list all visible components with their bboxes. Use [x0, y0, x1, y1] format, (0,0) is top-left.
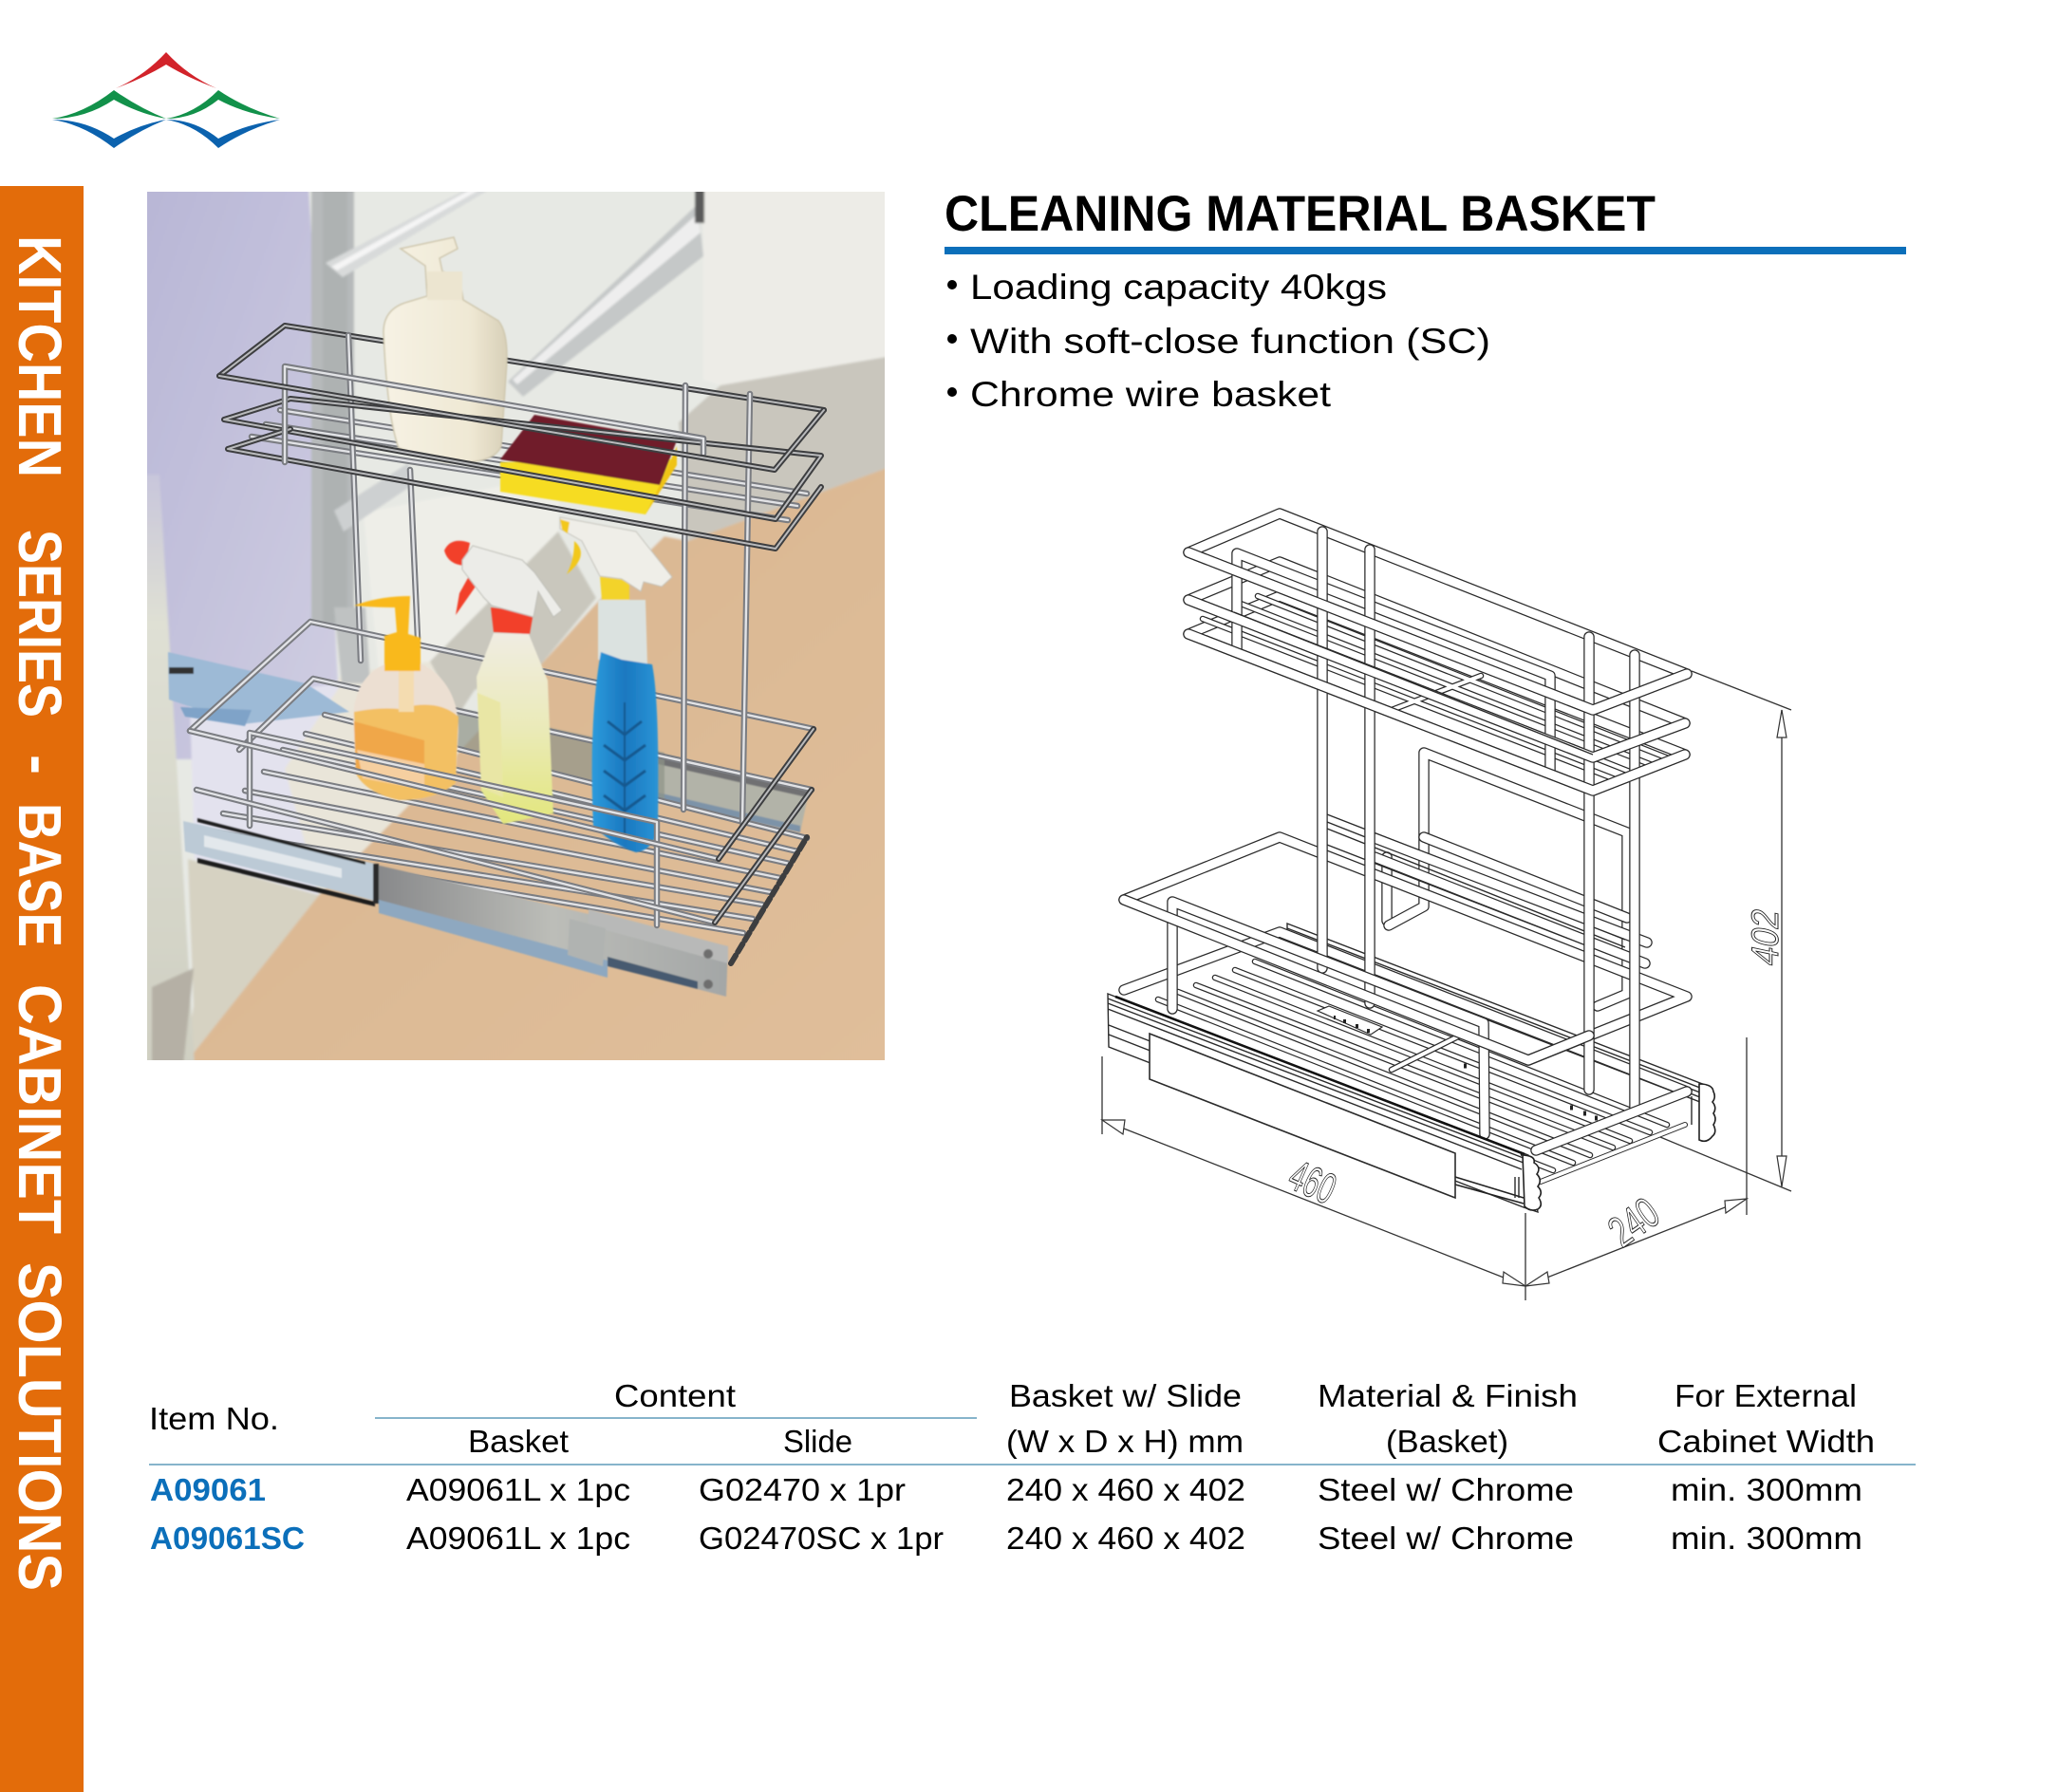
photo: wires in front of the bottles — [190, 366, 824, 963]
table row: A09061SC: A09061L x 1pc — [406, 1521, 630, 1556]
table row: A09061: 240 x 460 x 402 — [1006, 1472, 1245, 1507]
drawing: lower basket front rail — [1124, 900, 1687, 1182]
amber pump bottle — [353, 664, 458, 800]
sidebar: orange vertical band with series name: CABINET — [6, 984, 74, 1234]
photo: back slide rails — [168, 652, 810, 832]
dimension: height 402: 402 — [1743, 905, 1787, 969]
table row: A09061: A09061L x 1pc — [406, 1472, 630, 1507]
table row: A09061: Steel w/ Chrome — [1318, 1472, 1574, 1507]
dimension: height 402 — [1660, 671, 1791, 1191]
table header: Material & Finish — [1318, 1378, 1578, 1413]
blue spray bottle — [598, 600, 647, 664]
dimension: width 240: 240 — [1600, 1187, 1668, 1257]
table row: A09061 — [150, 1472, 1862, 1507]
drawing: front slide with plate — [1108, 994, 1715, 1212]
drawing: center frame and rails — [1327, 753, 1647, 1006]
spray bottle with red trigger — [477, 633, 553, 824]
feature list: With soft-close function (SC) — [970, 322, 1490, 361]
title: CLEANING MATERIAL BASKET — [945, 186, 1656, 242]
technical line drawing of basket with dimensions — [1102, 513, 1791, 1300]
cream pump bottle — [384, 237, 507, 462]
drawing: back slide — [1287, 924, 1705, 1104]
dimension: width 240 — [1525, 1037, 1747, 1286]
table header: Basket — [468, 1424, 569, 1459]
drawing: top basket front edges — [1188, 552, 1687, 791]
photo: bottles and sponge — [353, 237, 677, 852]
feature list: Chrome wire basket — [970, 375, 1332, 414]
table row: A09061SC: min. 300mm — [1671, 1521, 1862, 1556]
table row: A09061SC: 240 x 460 x 402 — [1006, 1521, 1245, 1556]
table row: A09061SC: A09061SC — [150, 1521, 305, 1556]
feature list: Loading capacity 40kgs — [970, 268, 1387, 307]
table header: (Basket) — [1386, 1424, 1508, 1459]
table row: A09061SC — [150, 1521, 1862, 1556]
table row: A09061SC: Steel w/ Chrome — [1318, 1521, 1574, 1556]
sidebar: orange vertical band with series name — [0, 186, 84, 1792]
table header: For External — [1674, 1378, 1857, 1413]
specification table — [149, 1378, 1916, 1556]
table header: Item No. — [149, 1401, 279, 1436]
table header: Slide — [783, 1424, 852, 1459]
drawing: lower basket top rail, back edges — [1124, 837, 1687, 1060]
sidebar: orange vertical band with series name: SERIES — [6, 530, 74, 718]
title underline — [945, 247, 1906, 254]
table header: (W x D x H) mm — [1006, 1424, 1244, 1459]
table header — [149, 1378, 1875, 1459]
table row: A09061: G02470 x 1pr — [699, 1472, 906, 1507]
table row: A09061: A09061 — [150, 1472, 266, 1507]
sidebar: orange vertical band with series name: KITCHEN — [6, 235, 74, 477]
dimension: depth 460 — [1102, 1056, 1525, 1300]
drawing: lower floor frame and rods — [1124, 932, 1687, 1170]
sidebar: orange vertical band with series name: - — [6, 755, 74, 775]
drawing: top basket lower layers — [1188, 513, 1687, 791]
photo: steel plate and slide — [183, 818, 728, 997]
drawing: four vertical posts — [1322, 532, 1635, 1108]
dimension: depth 460: 460 — [1282, 1150, 1343, 1214]
sidebar: orange vertical band with series name: SOLUTIONS — [6, 1262, 74, 1591]
photo: wires behind the bottles — [190, 326, 824, 933]
feature list — [947, 268, 1490, 414]
sponge — [500, 459, 677, 514]
sidebar: orange vertical band with series name: BASE — [6, 803, 74, 947]
table row: A09061: min. 300mm — [1671, 1472, 1862, 1507]
table header: Basket w/ Slide — [1009, 1378, 1242, 1413]
table header: Cabinet Width — [1657, 1424, 1875, 1459]
table row: A09061SC: G02470SC x 1pr — [699, 1521, 944, 1556]
product photo: chrome basket with cleaning bottles — [142, 188, 892, 1066]
logo: four-chevron diamond mark — [52, 52, 280, 148]
photo: room background — [142, 188, 892, 1066]
table header: Content — [614, 1378, 736, 1413]
